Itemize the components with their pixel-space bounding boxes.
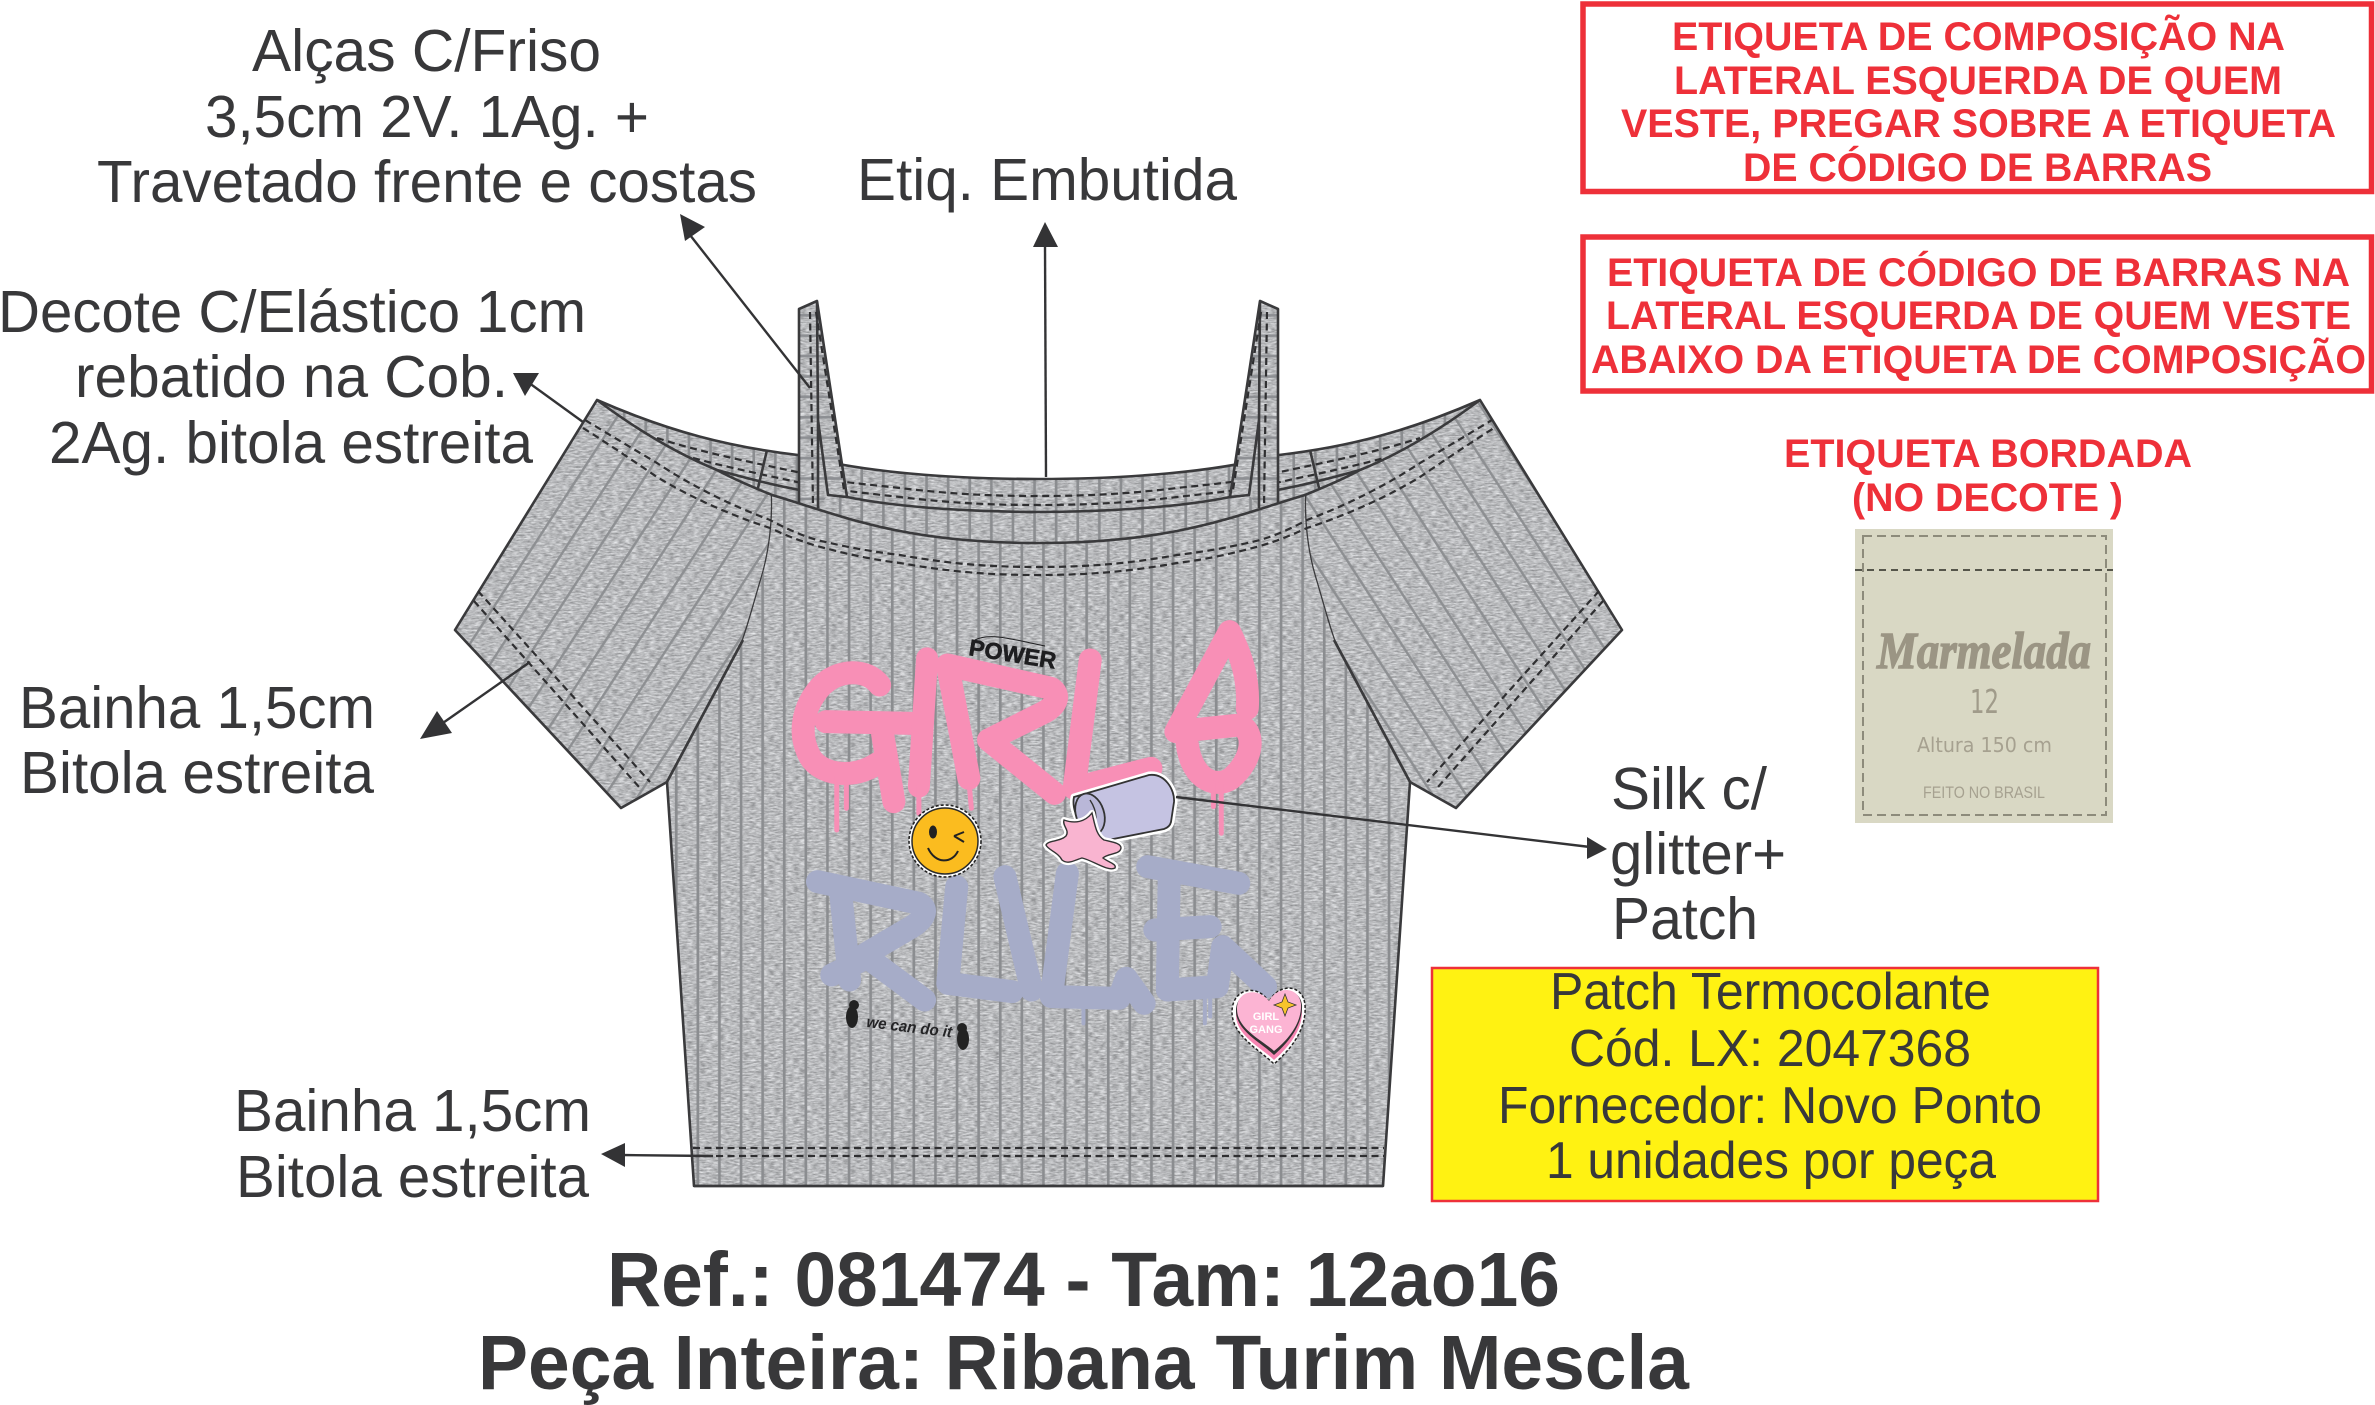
label: neckline note (0, 279, 586, 476)
label: silk print note: Patch (1612, 886, 1758, 952)
label: sleeve hem note (19, 675, 375, 806)
print: GIRLS (803, 632, 1250, 833)
title: reference and fabric: Ref.: 081474 - Tam: 12ao16 (607, 1237, 1560, 1323)
patch: girl gang heart: GANG (1250, 1024, 1282, 1036)
right sleeve (1300, 395, 1630, 815)
label: bottom hem note (234, 1078, 591, 1210)
callout: composition label instructions: ETIQUETA DE COMPOSIÇÃO NA (1672, 13, 2285, 59)
arrow: silk print (1176, 797, 1607, 859)
callout: barcode label instructions: LATERAL ESQUERDA DE QUEM VESTE (1606, 294, 2351, 338)
callout: patch details: 1 unidades por peça (1546, 1132, 1996, 1190)
label: straps note: Alças C/Friso (252, 18, 601, 84)
callout: patch details: Cód. LX: 2047368 (1569, 1020, 1971, 1078)
callout: composition label instructions (1583, 4, 2372, 192)
arrow: sleeve hem (420, 662, 530, 739)
label: silk print note: Silk c/ (1611, 756, 1768, 822)
label: straps note (97, 18, 757, 215)
embroidered label: Marmelada: FEITO NO BRASIL (1923, 784, 2045, 802)
callout: patch details (1432, 963, 2098, 1201)
embroidered label: Marmelada (1855, 529, 2113, 823)
patch: winking smiley (909, 805, 981, 877)
neckline elastic stitching (583, 420, 1494, 575)
title: reference and fabric: Peça Inteira: Ribana Turim Mescla (478, 1320, 1690, 1405)
embroidered label: Marmelada: 12 (1970, 682, 1999, 721)
callout: barcode label instructions: ABAIXO DA ETIQUETA DE COMPOSIÇÃO (1591, 336, 2366, 382)
arrow: neckline (513, 373, 583, 422)
callout: barcode label instructions (1583, 237, 2372, 391)
heading: embroidered label: ETIQUETA BORDADA (1784, 432, 2192, 476)
callout: composition label instructions: VESTE, PREGAR SOBRE A ETIQUETA (1621, 102, 2336, 146)
arrow: bottom hem (601, 1143, 713, 1167)
print: we can do it (846, 1000, 969, 1050)
patch: spilled paint can (1046, 775, 1174, 869)
title: reference and fabric (478, 1237, 1690, 1405)
label: sleeve hem note: Bitola estreita (20, 740, 374, 806)
callout: patch details: Fornecedor: Novo Ponto (1498, 1077, 2042, 1135)
label: neckline note: Decote C/Elástico 1cm (0, 279, 586, 345)
heading: embroidered label: (NO DECOTE ) (1852, 476, 2123, 520)
garment: off-shoulder ribbed crop top (450, 298, 1630, 1190)
label: neckline note: rebatido na Cob. (75, 344, 508, 410)
embroidered label: Marmelada: Marmelada (1876, 623, 2091, 680)
heading: embroidered label (1784, 432, 2192, 520)
callout: composition label instructions: DE CÓDIGO DE BARRAS (1743, 144, 2212, 190)
patch: girl gang heart (1232, 988, 1305, 1064)
arrow: embedded label (1033, 222, 1058, 477)
callout: barcode label instructions: ETIQUETA DE CÓDIGO DE BARRAS NA (1607, 249, 2350, 295)
garment body (660, 490, 1420, 1190)
back neckline band (598, 398, 1480, 542)
print: POWER: POWER (967, 634, 1059, 674)
label: straps note: 3,5cm 2V. 1Ag. + (205, 84, 649, 150)
label: bottom hem note: Bitola estreita (236, 1144, 589, 1210)
right strap (1228, 300, 1280, 508)
label: bottom hem note: Bainha 1,5cm (234, 1078, 591, 1144)
label: neckline note: 2Ag. bitola estreita (49, 410, 533, 476)
callout: composition label instructions: LATERAL ESQUERDA DE QUEM (1674, 59, 2282, 103)
left strap (798, 300, 848, 508)
label: sleeve hem note: Bainha 1,5cm (19, 675, 375, 741)
embroidered label: Marmelada: Altura 150 cm (1917, 733, 2052, 757)
callout: patch details: Patch Termocolante (1550, 963, 1991, 1021)
patch: girl gang heart: GIRL (1253, 1011, 1279, 1023)
print: we can do it: we can do it (866, 1014, 954, 1042)
bottom hem stitching (693, 1148, 1384, 1156)
label: silk print note (1610, 756, 1786, 952)
arrow: straps (680, 214, 810, 388)
label: straps note: Travetado frente e costas (97, 149, 757, 215)
print: RULE (817, 867, 1266, 1023)
label: silk print note: glitter+ (1610, 821, 1786, 887)
label: embedded label note: Etiq. Embutida (857, 147, 1237, 213)
left sleeve (450, 395, 780, 815)
